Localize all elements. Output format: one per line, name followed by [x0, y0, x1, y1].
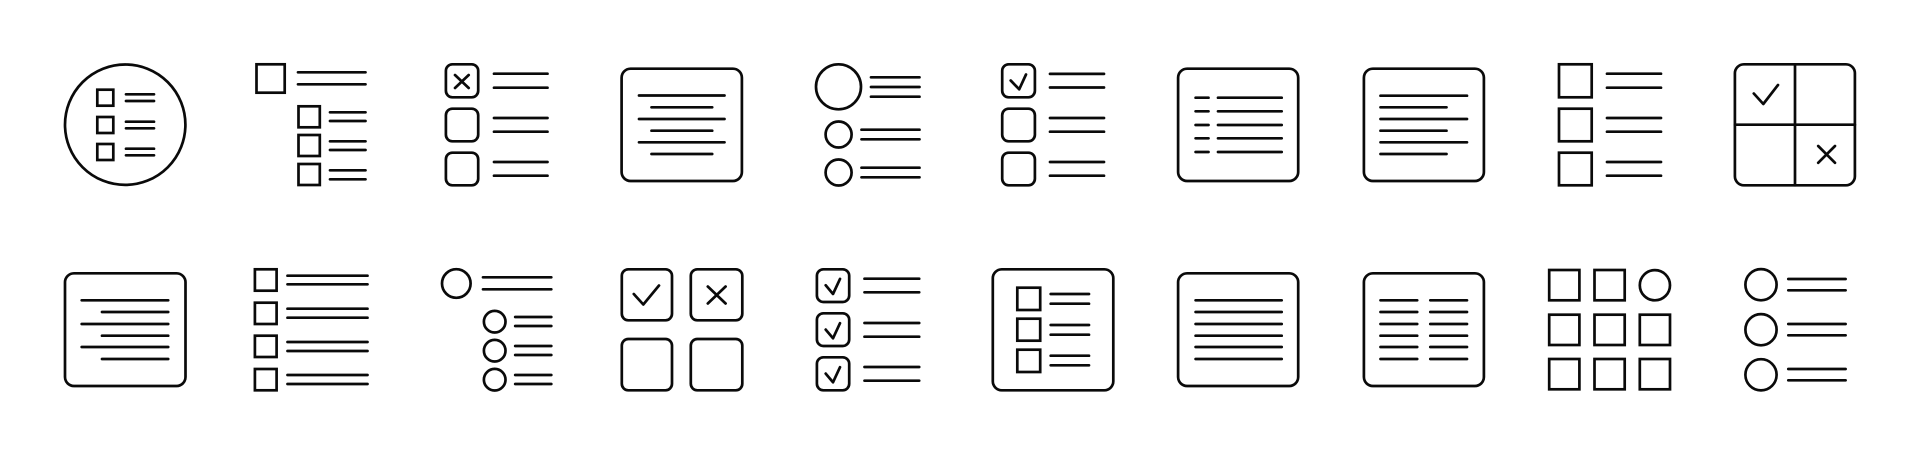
icon: three-item circle list — [1745, 269, 1846, 390]
icon: four-item square list — [255, 269, 368, 390]
icon: dashed list panel — [1178, 69, 1298, 181]
icon: checklist with cross — [446, 64, 548, 185]
icon: four-cell grid with check and cross — [1735, 64, 1855, 185]
icon: checklist panel — [993, 269, 1113, 390]
icon: checklist in circle — [65, 64, 185, 185]
icon: centered text panel — [622, 69, 742, 181]
icon: right-aligned text panel — [65, 273, 186, 386]
icon: checklist all checked — [817, 269, 919, 390]
icon: checklist with check — [1002, 64, 1104, 185]
icon: two-column text panel — [1364, 273, 1484, 386]
icon: square checkbox list — [1559, 64, 1661, 185]
icon: circle bullet list — [816, 64, 920, 186]
icon: three-by-three shape grid — [1549, 270, 1670, 389]
icon: four boxes with check and cross — [622, 269, 742, 390]
icon: nested circle list — [442, 269, 551, 391]
icon: left-aligned text panel — [1364, 69, 1484, 181]
icon: nested square list — [256, 64, 366, 185]
icon: full text panel — [1178, 273, 1298, 386]
